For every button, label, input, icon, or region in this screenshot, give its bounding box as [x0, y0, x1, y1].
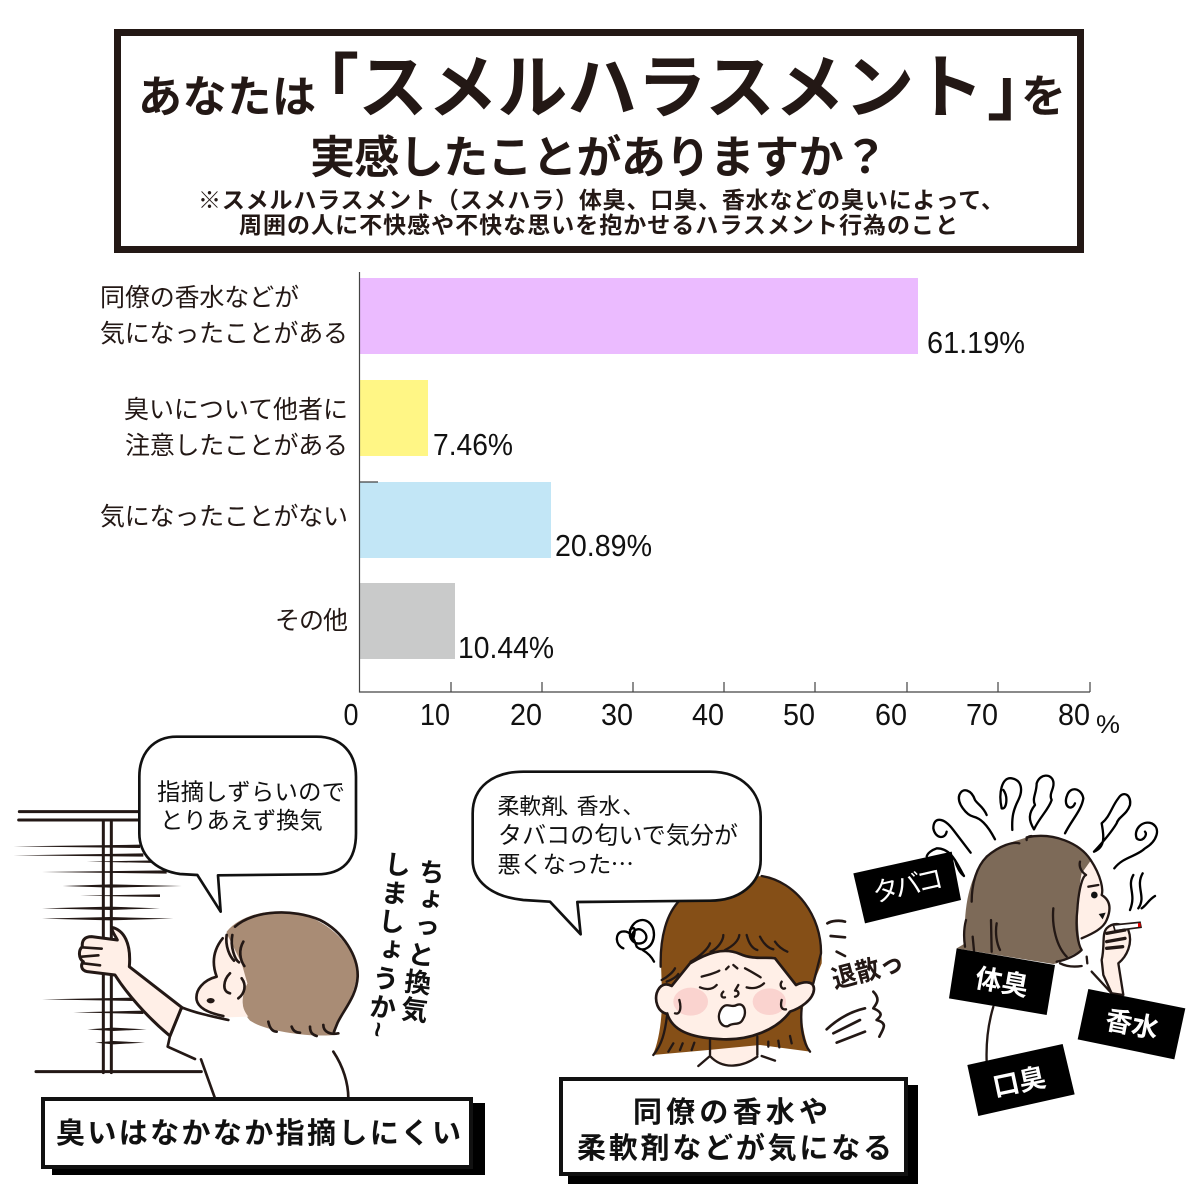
icon: smell wisps	[927, 776, 1157, 910]
caption: perfume and softener: 柔軟剤などが気になる	[577, 1131, 892, 1165]
bar: warned others: 注意したことがある	[125, 432, 348, 460]
axis labels: 20	[510, 697, 542, 732]
person: nose	[207, 998, 215, 1003]
caption: hard to point out: 臭いはなかなか指摘しにくい	[56, 1117, 461, 1150]
caption: perfume and softener: 同僚の香水や	[633, 1096, 828, 1129]
icon: cigarette	[1113, 922, 1141, 931]
bar: warned others	[124, 380, 513, 462]
axis labels: 0	[344, 697, 358, 732]
label: tobacco	[853, 852, 961, 923]
title: line one: 「	[293, 48, 359, 122]
person: outlines	[82, 912, 358, 1098]
bar: never noticed: 20.89%	[555, 528, 652, 563]
sound effect: retreat	[827, 921, 907, 1043]
title: definition note: 周囲の人に不快感や不快な思いを抱かせるハラスメント行為のこと	[239, 212, 958, 238]
label: bad breath	[967, 1044, 1075, 1116]
illustration: person smoking with smell labels	[853, 776, 1185, 1116]
bar: warned others: 臭いについて他者に	[124, 396, 348, 424]
illustration: woman feeling sick	[473, 772, 907, 1066]
label: perfume: 香水	[1103, 1005, 1161, 1044]
bar: perfume noticed: 同僚の香水などが	[100, 284, 299, 312]
axis labels: %	[1096, 711, 1120, 739]
bar: perfume noticed: 気になったことがある	[100, 320, 348, 348]
caption: hard to point out	[43, 1099, 485, 1175]
bar: never noticed	[100, 482, 652, 563]
handwritten remark: ちょっと換気	[395, 857, 446, 1026]
speech bubble: smell made me sick: 香水	[577, 794, 621, 819]
title: definition note: ※スメルハラスメント（スメハラ）体臭、口臭、香水などの臭いによって、	[198, 187, 1004, 213]
axis labels: 10	[420, 697, 450, 732]
axis labels: 30	[601, 697, 633, 732]
label: tobacco: タバコ	[870, 863, 946, 909]
person: face	[196, 933, 248, 1017]
axis labels: 80	[1058, 697, 1090, 732]
bar: warned others: 7.46%	[433, 427, 513, 462]
window blinds	[13, 812, 201, 1073]
bar: perfume noticed	[100, 278, 1025, 360]
woman: face	[656, 951, 814, 1039]
title: line one: あなたは	[138, 73, 316, 122]
woman: cheeks	[673, 988, 786, 1016]
woman: neck	[710, 1037, 757, 1066]
axis labels	[344, 697, 1120, 739]
label: body odor	[949, 948, 1055, 1015]
title: line two: 実感したことがありますか？	[310, 132, 888, 183]
panel: title box	[118, 32, 1080, 250]
person: eye and nose	[1091, 892, 1106, 919]
speech bubble: hard to point out: とりあえず換気	[160, 808, 323, 834]
woman: facial features	[653, 876, 821, 1066]
label: perfume	[1078, 989, 1185, 1059]
woman: hair	[653, 876, 822, 1055]
speech bubble: smell made me sick: 、	[622, 794, 644, 819]
axis labels: 50	[783, 697, 815, 732]
handwritten remark	[362, 849, 446, 1041]
label: bad breath: 口臭	[990, 1062, 1048, 1103]
handwritten remark: しましょうか~	[362, 849, 412, 1041]
axis labels: 40	[692, 697, 724, 732]
axis labels: 70	[966, 697, 998, 732]
person: hair	[227, 911, 357, 1036]
bar: other: その他	[275, 607, 348, 635]
title: line one: 」	[987, 54, 1053, 128]
person: face	[1078, 862, 1109, 938]
title: line one	[138, 48, 1066, 128]
bar: perfume noticed: 61.19%	[927, 325, 1025, 360]
sound effect: retreat: 退散っ	[828, 947, 907, 994]
speech bubble: smell made me sick: 、	[560, 794, 582, 819]
illustration: person opening blinds	[13, 737, 446, 1098]
speech bubble: smell made me sick: 悪くなった…	[497, 846, 634, 880]
caption: perfume and softener	[561, 1079, 918, 1184]
bar: other: 10.44%	[458, 630, 554, 665]
label: body odor: 体臭	[973, 963, 1031, 1002]
bar: never noticed: 気になったことがない	[100, 503, 348, 531]
speech bubble: smell made me sick: 柔軟剤	[497, 794, 563, 819]
bar: other	[275, 583, 554, 665]
speech bubble: smell made me sick	[473, 772, 761, 934]
title: definition note	[198, 187, 1004, 238]
speech bubble: smell made me sick: タバコの匂いで気分が	[498, 822, 738, 849]
axis labels: 60	[875, 697, 907, 732]
icon: frustration scribble	[617, 920, 654, 962]
bar chart	[100, 272, 1120, 739]
speech bubble: hard to point out: 指摘しずらいので	[157, 779, 345, 805]
chart axes	[360, 272, 1090, 692]
person: outlines	[964, 836, 1125, 1062]
person: arm and hand	[79, 927, 182, 1036]
title: line one: を	[1021, 71, 1066, 122]
person: arm and hand	[1102, 924, 1130, 995]
person: hair	[957, 836, 1092, 964]
title: line one: スメルハラスメント	[358, 49, 984, 127]
speech bubble: hard to point out	[139, 737, 356, 912]
